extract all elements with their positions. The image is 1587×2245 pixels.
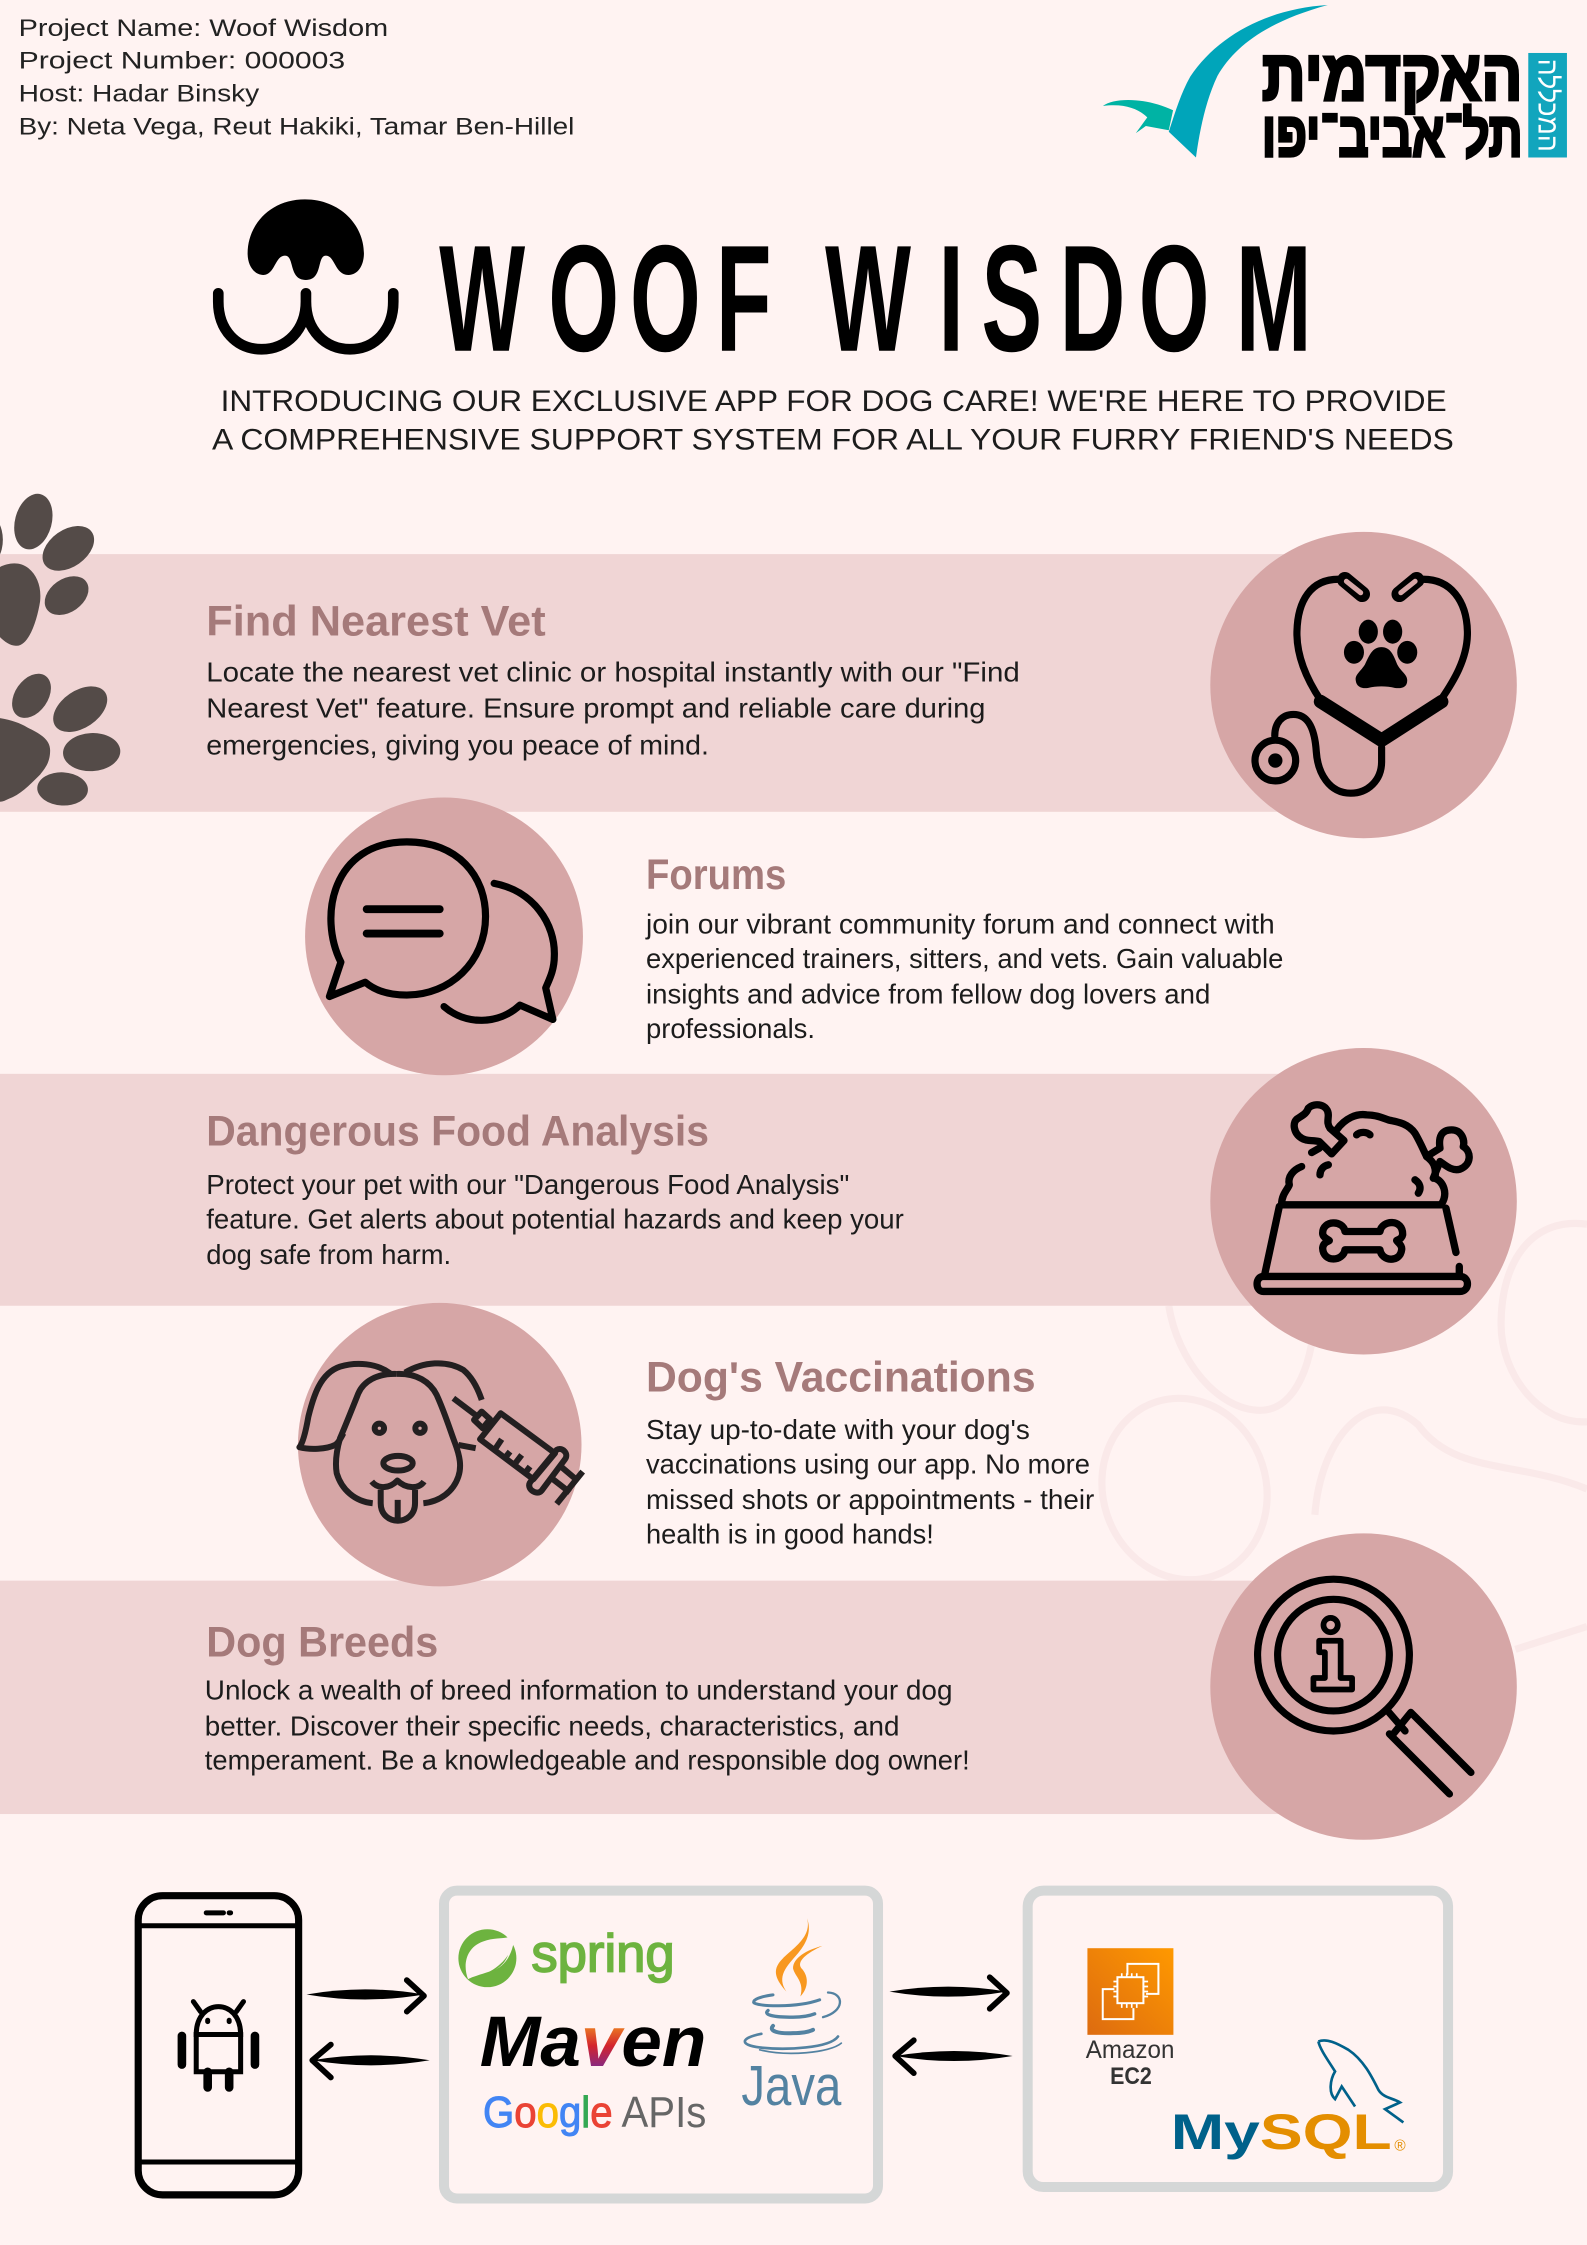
college logo [1103,5,1567,170]
text: dog breeds [205,1675,970,1776]
text: dog's vaccinations: vaccinations using our app. No more [646,1448,1090,1479]
panel: dog breeds [0,1533,1517,1840]
text: forums: join our vibrant community forum and connect with [645,909,1275,940]
text: dog's vaccinations: health is in good hands! [646,1518,934,1549]
text: dangerous food analysis: Protect your pet with our "Dangerous Food Analysis" [206,1169,849,1200]
arrow: phone to backend [307,1980,424,2012]
icon: paw [1344,620,1417,688]
text: dog breeds: temperament. Be a knowledgeable and responsible dog owner! [205,1745,970,1776]
icon: android [182,2002,255,2088]
icon: magnifier with info [1210,1533,1517,1840]
title: WOOF WISDOM [439,214,1312,384]
watermark: faint paw [1079,1223,1587,1649]
icon: phone [138,1896,299,2195]
icon: dog food bowl [1210,1048,1517,1354]
logo: amazon ec2 [1086,1948,1174,2090]
text: dog's vaccinations [646,1414,1094,1549]
logo: mysql: MySQL [1171,2104,1392,2160]
logo: hebrew name: האקדמית [1262,36,1523,116]
text: dog's vaccinations: missed shots or appointments - their [646,1484,1094,1515]
project info text: Project Name: Woof Wisdom [19,15,388,42]
text: dog breeds: better. Discover their specific needs, characteristics, and [205,1710,899,1741]
text: find nearest vet: Nearest Vet" feature. Ensure prompt and reliable care during [206,692,985,723]
panel: cloud and database [1028,1891,1448,2187]
logo: java [741,1918,842,2118]
logo mark: dog nose and mouth [218,199,393,349]
subtitle: A COMPREHENSIVE SUPPORT SYSTEM FOR ALL YOUR FURRY FRIEND'S NEEDS [212,424,1454,457]
project info text [19,15,574,141]
logo: hebrew name [1262,36,1523,170]
text: forums: professionals. [646,1013,815,1044]
project info text: By: Neta Vega, Reut Hakiki, Tamar Ben-Hillel [19,114,574,141]
heading: dog breeds: Dog Breeds [206,1619,438,1667]
project info text: Project Number: 000003 [19,48,345,75]
icon: dog with syringe [298,1303,583,1586]
text: dangerous food analysis [206,1169,904,1270]
panel: forums [305,797,1283,1075]
heading: find nearest vet: Find Nearest Vet [206,598,546,646]
logo: mysql: ® [1394,2137,1406,2154]
icon: stethoscope heart [1210,532,1517,838]
icon: chat bubbles [305,797,583,1075]
logo: side bar: המכללה [1531,59,1563,152]
text: dangerous food analysis: feature. Get alerts about potential hazards and keep your [206,1203,904,1234]
heading: dog's vaccinations: Dog's Vaccinations [646,1354,1036,1402]
subtitle [212,385,1454,457]
text: dog's vaccinations: Stay up-to-date with your dog's [646,1414,1030,1445]
logo: wing [1103,100,1173,133]
project info text: Host: Hadar Binsky [19,81,260,108]
logo: amazon ec2: EC2 [1110,2063,1152,2090]
heading: forums: Forums [646,851,786,899]
paw print: upper [0,489,102,646]
panel: dog's vaccinations [298,1303,1094,1586]
panel: backend stack [444,1891,878,2198]
text: find nearest vet [206,657,1020,761]
arrow: backend to cloud [889,1977,1007,2009]
paw print: lower [0,666,121,807]
arrow: backend to phone [312,2045,430,2077]
logo: amazon ec2: Amazon [1086,2036,1174,2064]
logo: check mark [1169,5,1328,157]
panel: find nearest vet [0,532,1517,838]
heading: dangerous food analysis: Dangerous Food Analysis [206,1107,709,1155]
logo: spring: spring [531,1925,675,1984]
arrow: cloud to backend [895,2040,1013,2073]
logo: google apis: Google APIs [483,2089,706,2137]
text: find nearest vet: emergencies, giving you peace of mind. [206,730,709,761]
logo: java: Java [741,2055,842,2118]
text: dog breeds: Unlock a wealth of breed information to understand your dog [205,1675,952,1705]
text: forums: insights and advice from fellow dog lovers and [646,979,1210,1010]
text: forums [645,909,1283,1044]
text: find nearest vet: Locate the nearest vet clinic or hospital instantly with our "Find [206,657,1020,688]
logo: maven: Maven [480,2002,706,2082]
logo: spring [458,1925,675,1987]
logo: mysql [1171,2040,1406,2160]
text: forums: experienced trainers, sitters, and vets. Gain valuable [646,943,1283,974]
panel: dangerous food analysis [0,1048,1517,1354]
subtitle: INTRODUCING OUR EXCLUSIVE APP FOR DOG CARE! WE'RE HERE TO PROVIDE [221,385,1447,418]
architecture diagram [138,1891,1448,2198]
text: dangerous food analysis: dog safe from harm. [206,1239,451,1270]
